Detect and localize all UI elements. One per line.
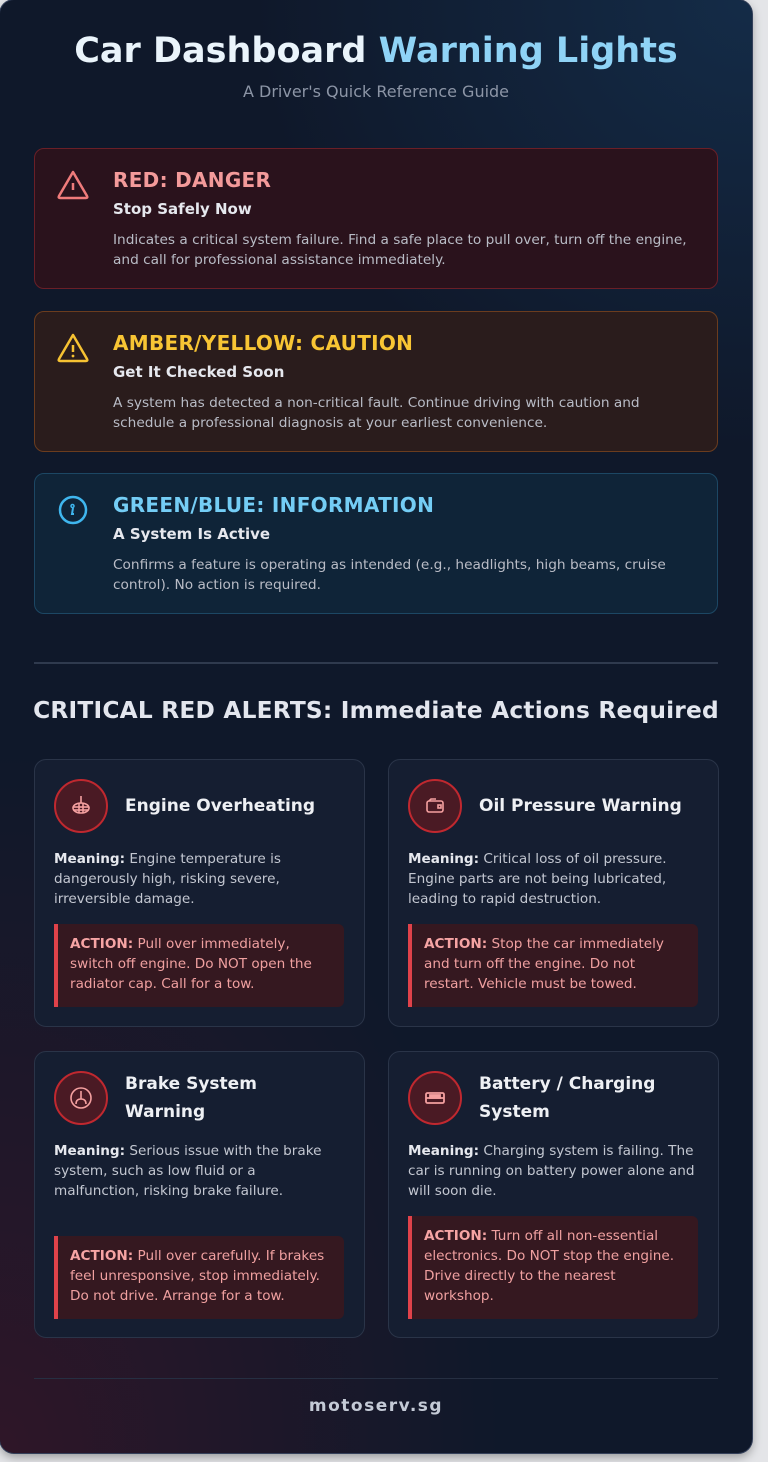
action: ACTION: Pull over immediately,	[70, 936, 290, 952]
meaning: dangerously high, risking severe,	[54, 871, 280, 887]
meaning: car is running on battery power alone and	[408, 1163, 694, 1179]
text	[113, 395, 640, 431]
subheading: A System Is Active	[113, 525, 270, 543]
heading	[125, 1074, 257, 1122]
action	[54, 924, 344, 1007]
heading: Warning	[125, 1102, 205, 1122]
card: battery charging	[388, 1051, 719, 1338]
subheading: Stop Safely Now	[113, 200, 252, 218]
footer: motoserv.sg	[309, 1396, 443, 1416]
panel: amber caution	[34, 311, 718, 452]
text	[113, 557, 666, 593]
action: ACTION: Stop the car immediately	[424, 936, 664, 952]
action: feel unresponsive, stop immediately.	[70, 1268, 320, 1284]
subheading: Get It Checked Soon	[113, 363, 284, 381]
meaning: will soon die.	[408, 1183, 497, 1199]
heading	[479, 1074, 655, 1122]
text: Confirms a feature is operating as intended (e.g., headlights, high beams, cruise	[113, 557, 666, 573]
action: ACTION: Pull over carefully. If brakes	[70, 1248, 324, 1264]
meaning	[408, 1143, 694, 1199]
icon: oil can	[408, 779, 462, 833]
text: A system has detected a non-critical fault. Continue driving with caution and	[113, 395, 640, 411]
text: and call for professional assistance immediately.	[113, 252, 446, 268]
icon: info circle	[58, 496, 88, 524]
heading: AMBER/YELLOW: CAUTION	[113, 331, 413, 355]
heading: Engine Overheating	[125, 796, 315, 816]
text: schedule a professional diagnosis at your earliest convenience.	[113, 415, 547, 431]
card: brake system	[34, 1051, 365, 1338]
icon: warning triangle red	[57, 170, 89, 200]
meaning: Meaning: Engine temperature is	[54, 851, 281, 867]
heading: GREEN/BLUE: INFORMATION	[113, 493, 434, 517]
meaning: Meaning: Serious issue with the brake	[54, 1143, 321, 1159]
heading: Brake System	[125, 1074, 257, 1094]
panel: red danger	[34, 148, 718, 289]
action: Drive directly to the nearest	[424, 1268, 616, 1284]
section heading: CRITICAL RED ALERTS: Immediate Actions Required	[33, 697, 719, 724]
title: Car Dashboard Warning Lights	[74, 31, 678, 71]
meaning: leading to rapid destruction.	[408, 891, 601, 907]
action	[408, 1216, 698, 1319]
meaning	[54, 851, 281, 907]
meaning: Meaning: Critical loss of oil pressure.	[408, 851, 667, 867]
text: control). No action is required.	[113, 577, 321, 593]
meaning: system, such as low fluid or a	[54, 1163, 256, 1179]
meaning: Engine parts are not being lubricated,	[408, 871, 666, 887]
heading: System	[479, 1102, 550, 1122]
meaning: Meaning: Charging system is failing. The	[408, 1143, 693, 1159]
icon: brake	[54, 1071, 108, 1125]
heading: Oil Pressure Warning	[479, 796, 682, 816]
action: switch off engine. Do NOT open the	[70, 956, 312, 972]
meaning	[54, 1143, 321, 1199]
subtitle: A Driver's Quick Reference Guide	[243, 82, 509, 101]
text	[113, 232, 687, 268]
heading: RED: DANGER	[113, 168, 271, 192]
meaning: irreversible damage.	[54, 891, 195, 907]
icon: warning triangle amber	[57, 334, 89, 362]
meaning: malfunction, risking brake failure.	[54, 1183, 283, 1199]
action: ACTION: Turn off all non-essential	[424, 1228, 658, 1244]
panel: green/blue information	[34, 473, 718, 614]
meaning	[408, 851, 667, 907]
card: oil pressure	[388, 759, 719, 1027]
heading: Battery / Charging	[479, 1074, 655, 1094]
action: Do not drive. Arrange for a tow.	[70, 1288, 285, 1304]
icon: temperature	[54, 779, 108, 833]
card: engine overheating	[34, 759, 365, 1027]
action	[408, 924, 698, 1007]
action: radiator cap. Call for a tow.	[70, 976, 254, 992]
action: workshop.	[424, 1288, 494, 1304]
icon: battery	[408, 1071, 462, 1125]
action: and turn off the engine. Do not	[424, 956, 635, 972]
action: restart. Vehicle must be towed.	[424, 976, 637, 992]
action: electronics. Do NOT stop the engine.	[424, 1248, 674, 1264]
text: Indicates a critical system failure. Find a safe place to pull over, turn off the engine,	[113, 232, 687, 248]
action	[54, 1236, 344, 1319]
